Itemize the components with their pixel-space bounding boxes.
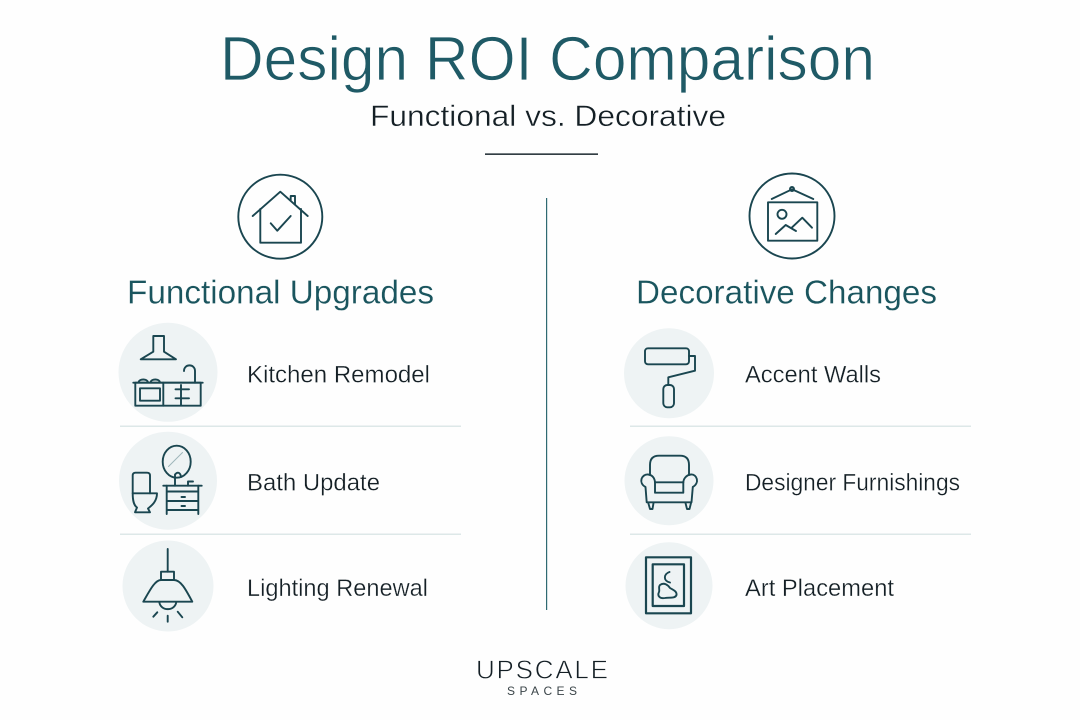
logo: upscale spaces [476,654,608,698]
item: accent walls [624,328,881,418]
divider [630,426,971,427]
divider [120,426,461,427]
item: bath update [119,432,380,530]
icon: armchair [624,436,714,525]
center divider [546,198,547,610]
logo: upscale spaces: SPACES [507,684,577,698]
label: bath update: Bath Update [247,470,380,497]
label: kitchen remodel: Kitchen Remodel [247,361,430,388]
icon: kitchen [118,323,218,422]
label: lighting renewal: Lighting Renewal [247,575,428,602]
icon: house with check [238,175,322,259]
item: art placement [626,542,894,629]
panel: functional upgrades [118,175,461,631]
divider [630,534,971,535]
icon: framed art [626,542,712,629]
label: designer furnishings: Designer Furnishings [745,470,960,497]
divider [120,534,461,535]
heading: decorative changes: Decorative Changes [636,273,937,310]
icon: pendant lamp [122,540,214,632]
label: accent walls: Accent Walls [745,361,881,388]
title: Design ROI Comparison [220,25,875,94]
label: art placement: Art Placement [745,575,894,602]
heading: functional upgrades: Functional Upgrades [127,273,434,310]
logo: upscale spaces: UPSCALE [476,654,608,684]
icon: paint roller [624,328,714,418]
panel: decorative changes [624,174,971,629]
item: designer furnishings [624,436,960,525]
item: lighting renewal [122,540,428,632]
item: kitchen remodel [118,323,430,422]
subtitle: Functional vs. Decorative [370,100,726,133]
icon: bath [119,432,217,530]
icon: framed picture [750,174,834,258]
title rule [485,153,598,155]
